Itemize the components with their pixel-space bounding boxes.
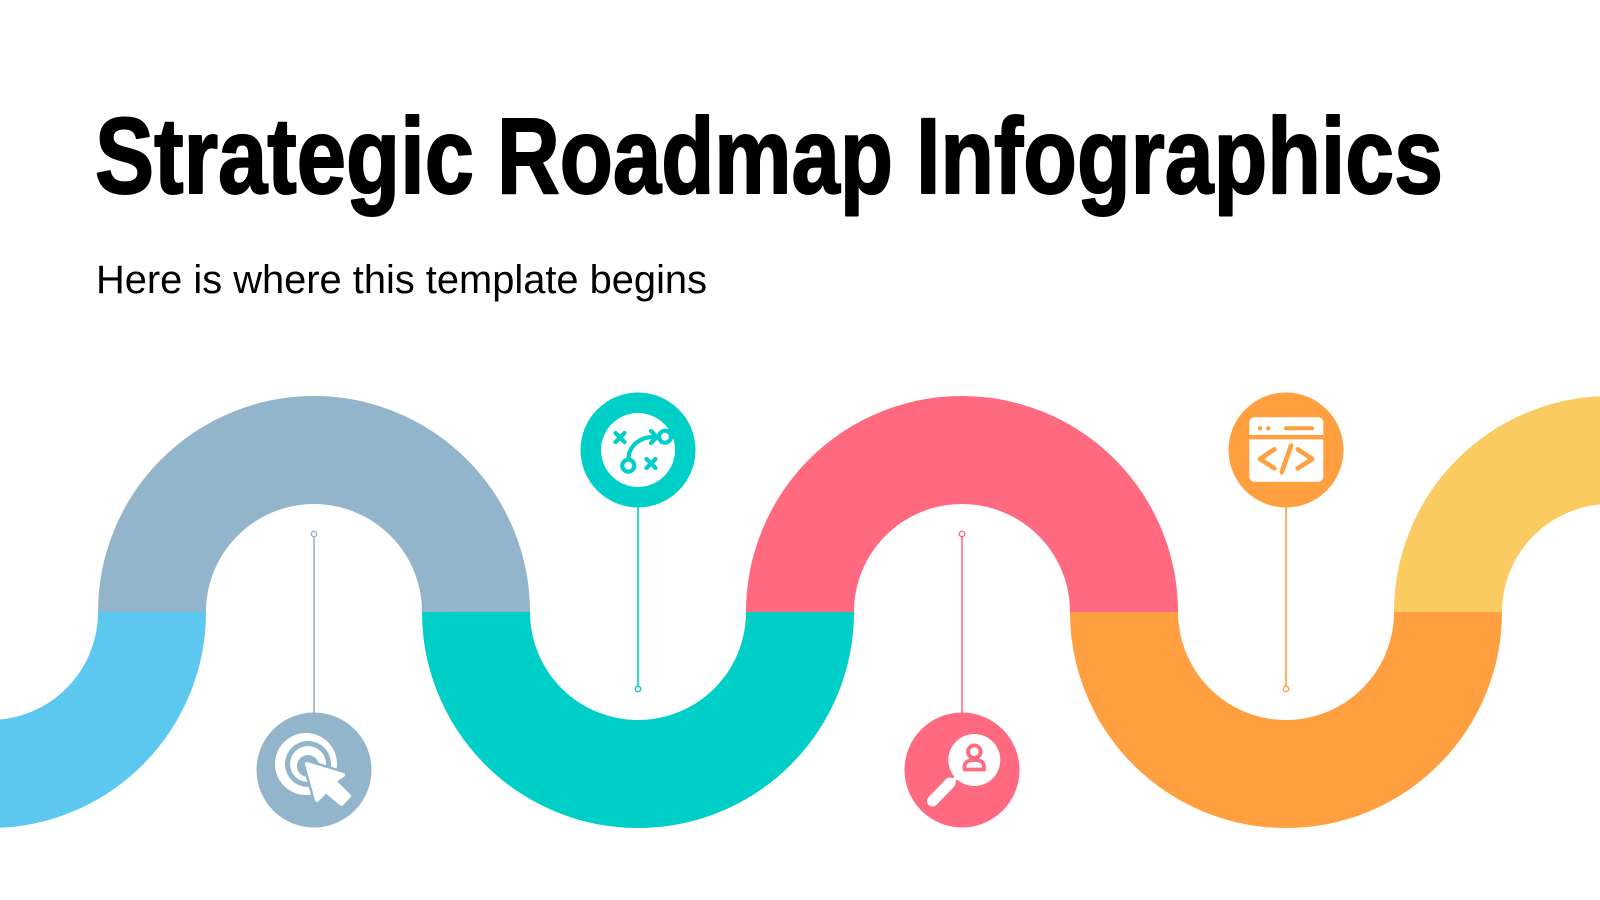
- title: Strategic: [95, 95, 474, 216]
- subtitle: Here is where this template begins: [96, 258, 707, 302]
- road segment: blue: [0, 612, 152, 774]
- road segment: grey-blue: [152, 450, 476, 612]
- road segment: yellow: [1448, 450, 1600, 612]
- marker 3: person search: [904, 531, 1020, 828]
- road segment: orange: [1124, 612, 1448, 774]
- icon: code browser window: [1228, 392, 1344, 508]
- title: Roadmap: [497, 95, 893, 216]
- icon: strategy play: [580, 392, 696, 508]
- connector line 3: [959, 531, 965, 714]
- icon: click cursor on target: [256, 712, 372, 828]
- connector line 1: [311, 531, 317, 714]
- title: Infographics: [916, 95, 1443, 216]
- connector line 4: [1283, 506, 1289, 692]
- icon: magnifier with person: [904, 712, 1020, 828]
- title: [95, 95, 1443, 216]
- marker 4: code window: [1228, 392, 1344, 692]
- connector line 2: [635, 506, 641, 692]
- marker 2: strategy: [580, 392, 696, 692]
- marker 1: click target: [256, 531, 372, 828]
- road segment: pink: [800, 450, 1124, 612]
- roadmap path: [0, 450, 1600, 774]
- road segment: teal: [476, 612, 800, 774]
